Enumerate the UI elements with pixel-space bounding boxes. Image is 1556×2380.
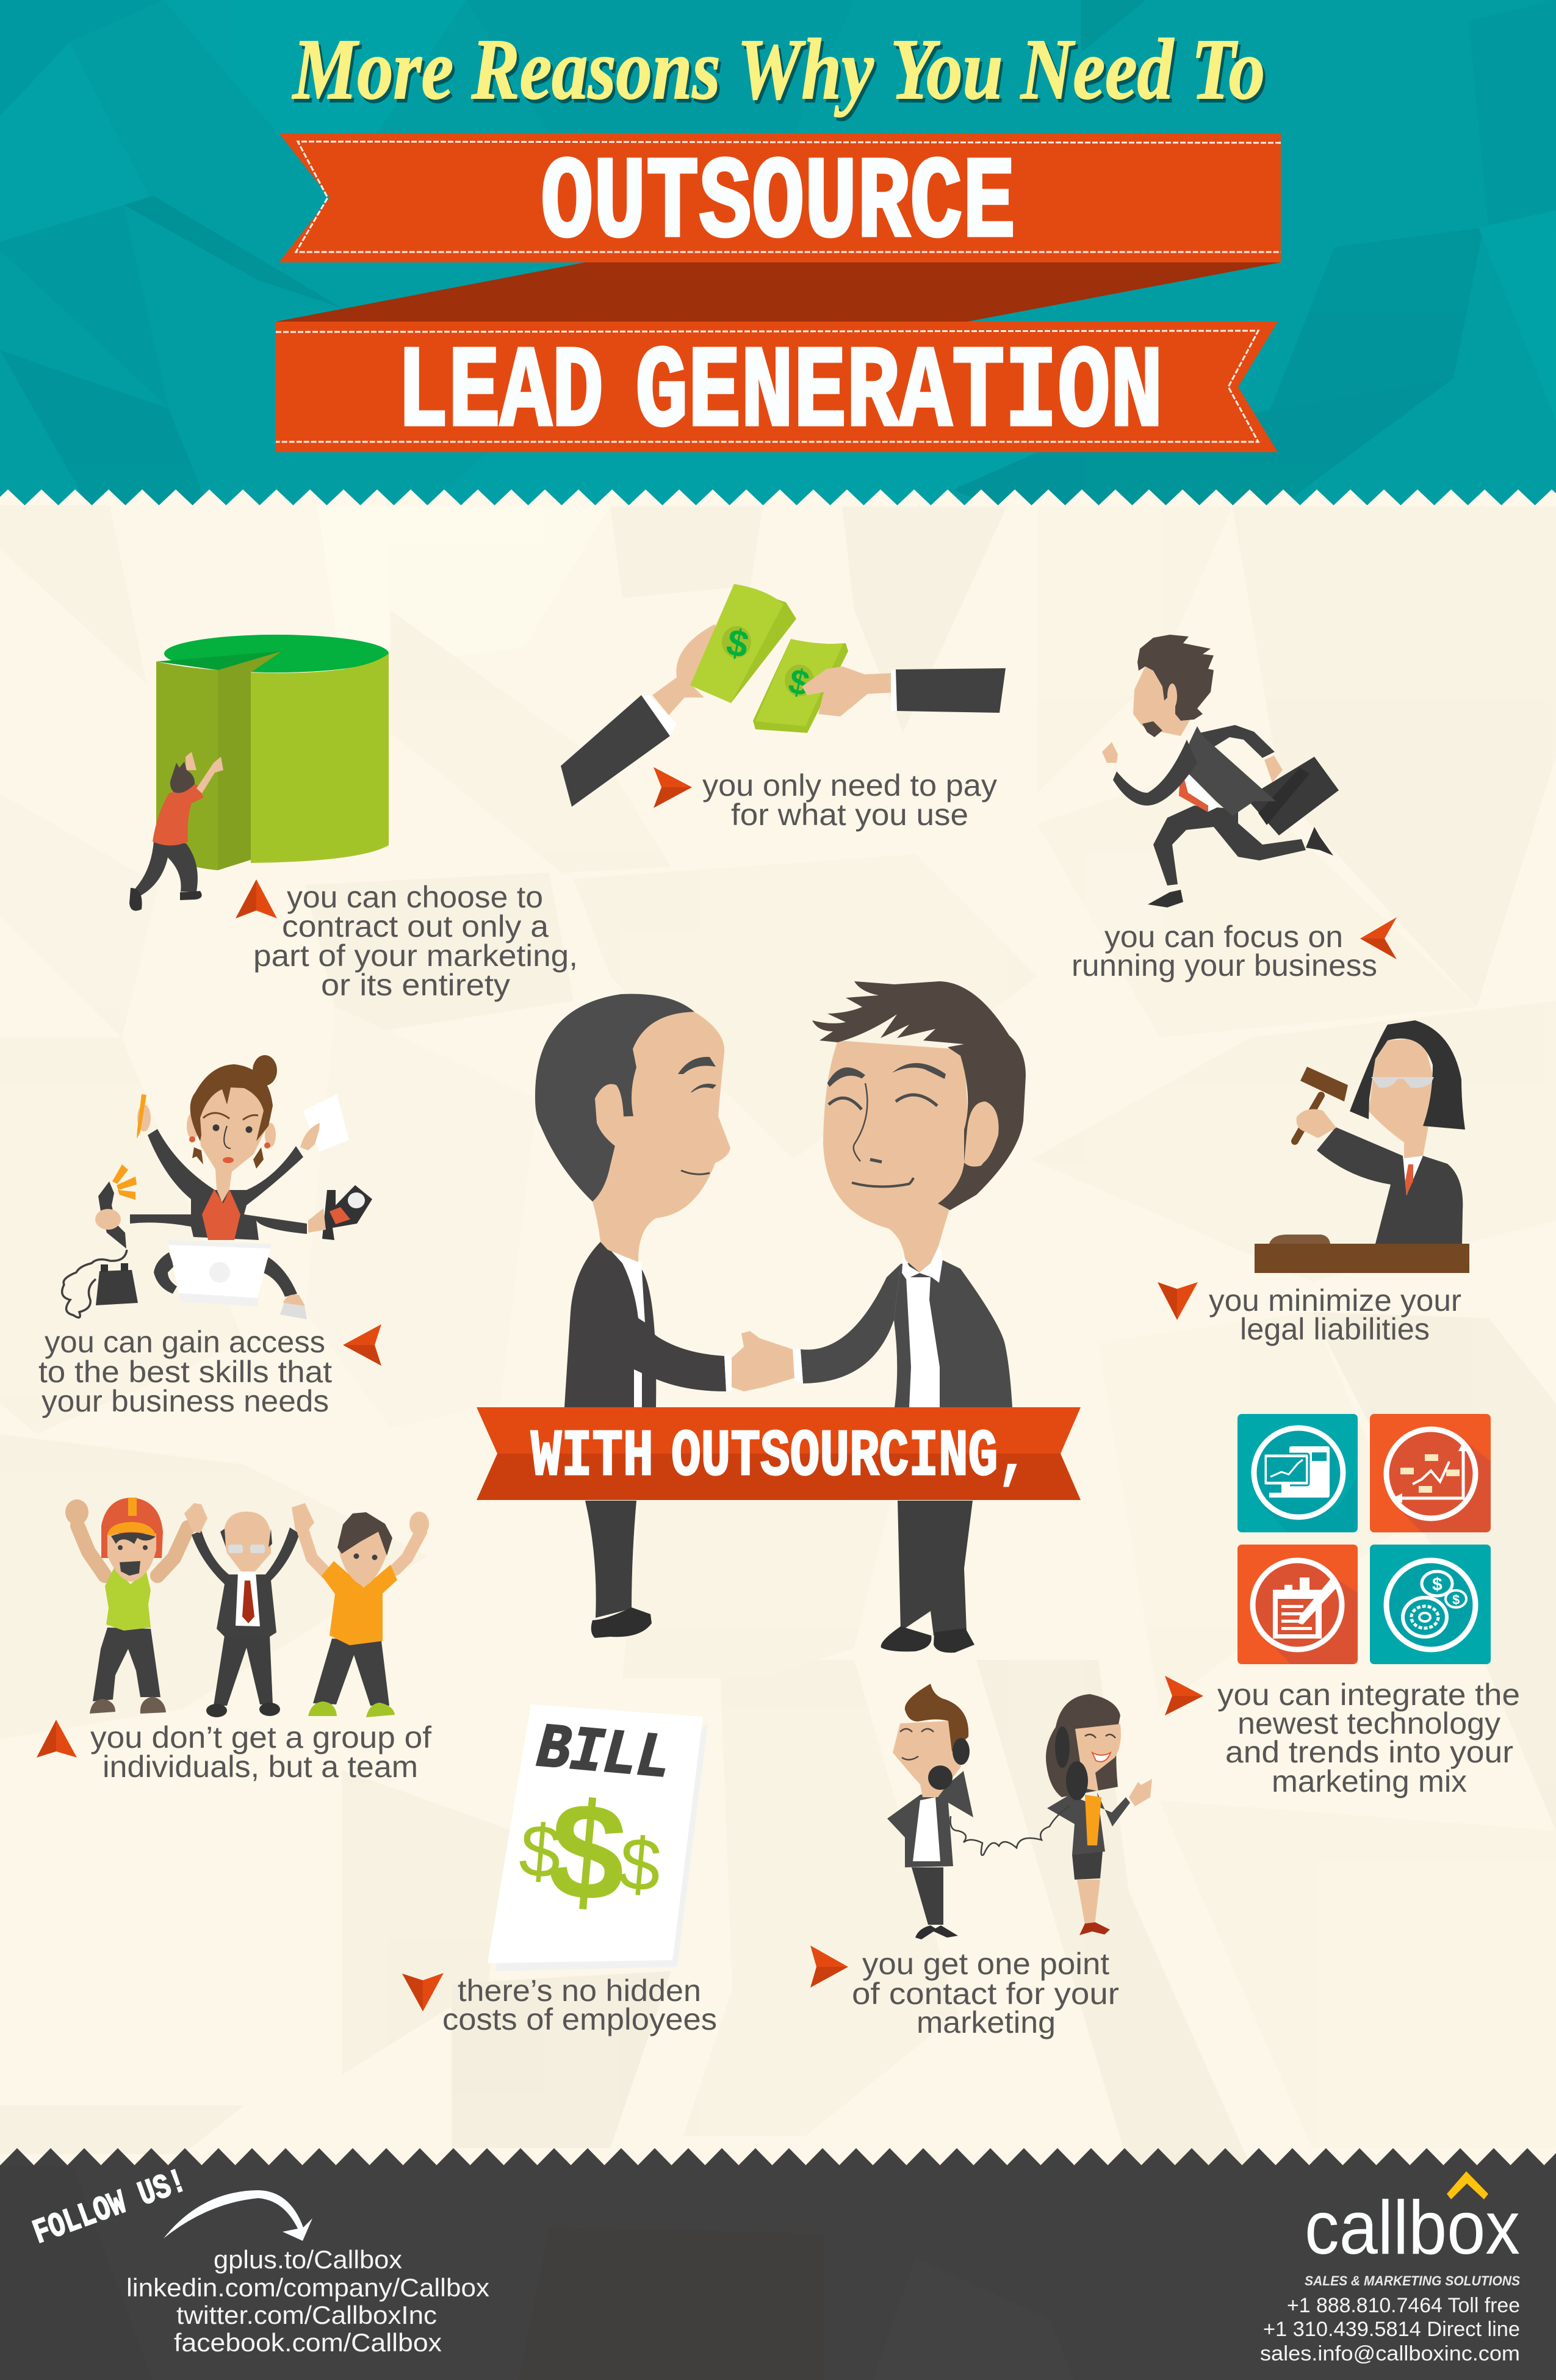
- footer: callbox logo and contact: callbox: [1305, 2186, 1520, 2270]
- main cream background: [0, 489, 1556, 2166]
- text: one point of contact: [852, 1947, 1119, 2039]
- icon: arrow: [1158, 1282, 1198, 1320]
- title: more reasons why you need to: More Reasons Why You Need To: [292, 21, 1265, 117]
- text: hidden costs: [442, 1974, 717, 2036]
- icon: arrow: [37, 1720, 77, 1758]
- ribbon banner: outsource / lead generation: [276, 133, 1281, 460]
- text: legal liabilities: legal liabilities: [1240, 1312, 1430, 1346]
- text: one point of contact: marketing: [917, 2005, 1056, 2039]
- icon: coins and gear tile: [1370, 1545, 1491, 1664]
- text: integrate technology: [1217, 1678, 1520, 1798]
- panel: team of three: [65, 1498, 429, 1717]
- text: hidden costs: there’s no hidden: [458, 1974, 701, 2008]
- text: best skills: your business needs: [41, 1384, 329, 1418]
- text: hidden costs: costs of employees: [442, 2002, 717, 2036]
- panel: judge with gavel: [1255, 1020, 1469, 1273]
- icon: pencil and hand: [137, 1094, 151, 1139]
- text: focus on running your business: running your business: [1072, 948, 1377, 983]
- figure: woman body: [130, 1055, 307, 1307]
- text: pay for what you use: you only need to pay: [702, 768, 997, 802]
- text: integrate technology: you can integrate the: [1217, 1678, 1520, 1712]
- footer: follow us: FOLLOW US!: [28, 2162, 192, 2253]
- text: integrate technology: newest technology: [1237, 1706, 1500, 1740]
- icon: arrow: [810, 1945, 848, 1988]
- icon: arrow: [236, 879, 277, 918]
- icon: coins and gear tile: $: [1452, 1592, 1460, 1607]
- panel: pie cylinder and pushing man: [129, 635, 389, 911]
- banner: with outsourcing: [477, 1407, 1081, 1500]
- icon: man pushing: [129, 752, 223, 911]
- figure: head: [1133, 635, 1214, 737]
- footer: social links: twitter.com/CallboxInc: [176, 2301, 437, 2329]
- icon: desk phone and cord: [62, 1164, 138, 1318]
- text: integrate technology: and trends into your: [1225, 1735, 1513, 1769]
- figure: woman on phone: [1046, 1694, 1152, 1935]
- icon: device and hand: [308, 1185, 372, 1240]
- footer: follow us: [28, 2162, 312, 2253]
- text: team: individuals, but a team: [103, 1750, 418, 1784]
- footer: callbox logo and contact: SALES & MARKETING SOLUTIONS: [1305, 2273, 1520, 2288]
- text: contract out: or its entirety: [321, 968, 510, 1002]
- figure: legs and shoes: [1148, 806, 1333, 907]
- text: legal liabilities: [1209, 1283, 1461, 1346]
- icon: computer tile: [1237, 1414, 1358, 1532]
- figure: bald man in suit: [184, 1503, 314, 1717]
- panel: multitasking woman: [62, 1055, 372, 1319]
- panel: two businessmen shaking hands: [535, 981, 1026, 1653]
- panel: money exchange hands: [561, 584, 1006, 807]
- figure: helmet man: [65, 1498, 188, 1714]
- text: team: [90, 1720, 431, 1784]
- footer: social links: linkedin.com/company/Callbox: [126, 2273, 489, 2302]
- text: one point of contact: of contact for your: [852, 1977, 1119, 2011]
- icon: curved arrow: [164, 2190, 312, 2241]
- text: integrate technology: marketing mix: [1272, 1764, 1467, 1798]
- icon: chevron: [1447, 2171, 1488, 2199]
- panel: bill: $: [616, 1821, 665, 1908]
- text: pay for what you use: [702, 768, 997, 832]
- banner: with outsourcing: WITH: [531, 1420, 654, 1495]
- icon: arrow: [654, 767, 692, 808]
- text: focus on running your business: [1072, 920, 1377, 983]
- text: contract out: [253, 880, 578, 1002]
- footer: callbox logo and contact: [1260, 2171, 1520, 2365]
- panel: money exchange hands: $: [785, 661, 813, 704]
- footer: social links: [126, 2245, 489, 2357]
- text: focus on running your business: you can focus on: [1104, 920, 1343, 954]
- panel: money exchange hands: $: [723, 621, 752, 666]
- text: pay for what you use: for what you use: [731, 798, 968, 832]
- text: contract out: part of your marketing,: [253, 939, 578, 973]
- icon: line chart tile: [1370, 1414, 1491, 1532]
- icon: handshake: [732, 1331, 794, 1391]
- text: best skills: you can gain access: [45, 1325, 325, 1359]
- text: best skills: to the best skills that: [38, 1355, 332, 1389]
- icon: arrow: [343, 1324, 381, 1366]
- panel: phone call couple: [887, 1684, 1152, 1939]
- text: contract out: contract out only a: [282, 909, 549, 943]
- ribbon banner: outsource / lead generation: OUTSOURCE: [541, 140, 1015, 271]
- footer background: [0, 2148, 1556, 2380]
- footer: callbox logo and contact: sales.info@callboxinc.com: [1260, 2342, 1520, 2365]
- footer: social links: facebook.com/Callbox: [174, 2328, 442, 2357]
- figure: right man: [793, 981, 1026, 1653]
- figure: jacket and arms: [1102, 725, 1283, 816]
- text: contract out: you can choose to: [287, 880, 543, 914]
- ribbon banner: outsource / lead generation: LEAD: [397, 329, 603, 460]
- icon: arrow: [1165, 1676, 1203, 1715]
- icon: green cylinder: [156, 635, 389, 870]
- panel: technology icon tiles: [1237, 1414, 1491, 1664]
- header background: [0, 0, 1556, 507]
- icon: paper and hand: [300, 1094, 349, 1152]
- text: one point of contact: you get one point: [862, 1947, 1109, 1981]
- footer: callbox logo and contact: +1 310.439.5814 Direct line: [1263, 2318, 1520, 2341]
- icon: mouse: [280, 1294, 307, 1319]
- panel: bill: [488, 1704, 708, 1971]
- icon: phone cord: [951, 1806, 1070, 1855]
- figure: man in orange shirt: [303, 1512, 429, 1717]
- text: legal liabilities: you minimize your: [1209, 1283, 1461, 1318]
- ribbon banner: outsource / lead generation: GENERATION: [635, 329, 1163, 460]
- icon: coins and gear tile: $: [1432, 1574, 1443, 1595]
- panel: bill: BILL: [534, 1713, 673, 1795]
- icon: report tile: [1237, 1545, 1358, 1664]
- text: best skills: [38, 1325, 332, 1418]
- icon: arrow: [402, 1973, 444, 2011]
- figure: man on phone: [887, 1684, 973, 1939]
- icon: arrow: [1360, 917, 1397, 959]
- panel: bill: $: [516, 1808, 564, 1894]
- banner: with outsourcing: OUTSOURCING,: [671, 1420, 1028, 1495]
- figure: left man: [535, 994, 732, 1638]
- panel: running businessman: [1102, 635, 1339, 907]
- footer: callbox logo and contact: +1 888.810.7464 Toll free: [1287, 2294, 1520, 2317]
- text: team: you don’t get a group of: [90, 1720, 431, 1754]
- footer: social links: gplus.to/Callbox: [214, 2245, 402, 2274]
- icon: briefcase: [1246, 757, 1339, 835]
- panel: bill: $: [543, 1772, 632, 1931]
